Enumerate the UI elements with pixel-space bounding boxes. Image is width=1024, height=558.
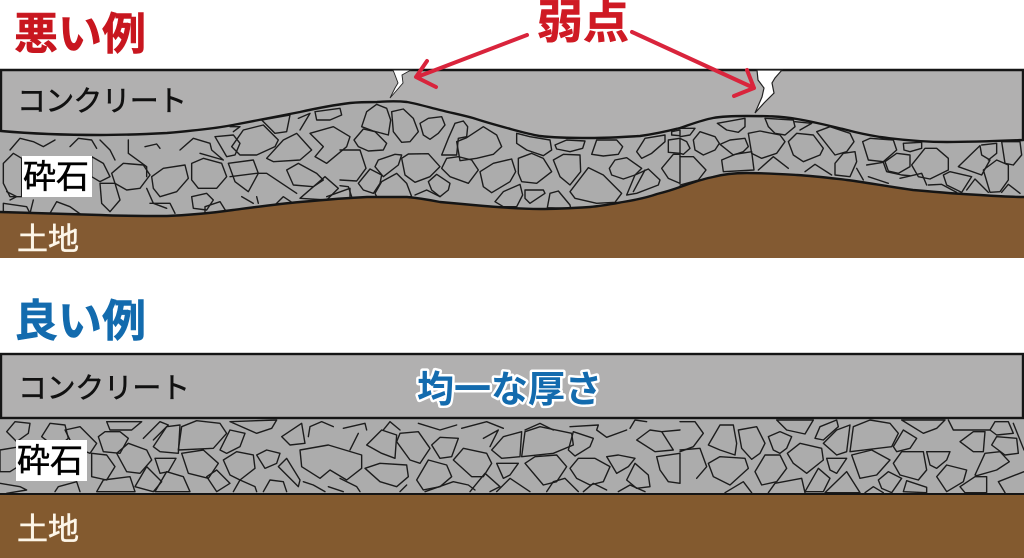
arrow: to left crack bbox=[416, 35, 527, 87]
stones in uneven gravel bbox=[3, 104, 1022, 215]
callout: uniform thickness: 均一な厚さ bbox=[417, 369, 602, 410]
panel: good example cross-section bbox=[0, 354, 1024, 558]
label: soil (bad): 土地 bbox=[17, 222, 79, 257]
stones in even gravel bbox=[0, 420, 1024, 493]
stones: middle section bbox=[340, 104, 680, 208]
label: soil (good): 土地 bbox=[17, 512, 79, 547]
label: concrete (good): コンクリート bbox=[18, 373, 190, 405]
label: gravel (good): 砕石 bbox=[17, 442, 83, 479]
crack: left weak point bbox=[390, 70, 411, 98]
crack: right weak point bbox=[755, 70, 782, 113]
label: gravel (bad): 砕石 bbox=[23, 158, 89, 195]
gravel layer (uneven) bbox=[0, 100, 1024, 218]
soil layer (uneven) bbox=[0, 173, 1024, 258]
heading: good example: 良い例 bbox=[14, 297, 146, 346]
soil layer (flat) bbox=[0, 494, 1024, 558]
stones: right section bbox=[680, 118, 1022, 193]
soil boundary line bbox=[0, 173, 1024, 216]
concrete slab bbox=[1, 70, 1023, 142]
stones: right section bbox=[680, 420, 1024, 493]
stones: left section bbox=[0, 420, 362, 493]
heading: bad example: 悪い例 bbox=[14, 10, 146, 59]
arrow: to right crack bbox=[632, 32, 754, 96]
panel: bad example cross-section bbox=[0, 70, 1024, 258]
label: concrete (bad): コンクリート bbox=[17, 86, 187, 118]
stones: middle section bbox=[340, 420, 680, 492]
concrete slab (even) bbox=[1, 354, 1023, 418]
stones: left section bbox=[3, 108, 350, 215]
gravel layer (flat) bbox=[0, 418, 1024, 494]
soil boundary line bbox=[0, 493, 1024, 495]
